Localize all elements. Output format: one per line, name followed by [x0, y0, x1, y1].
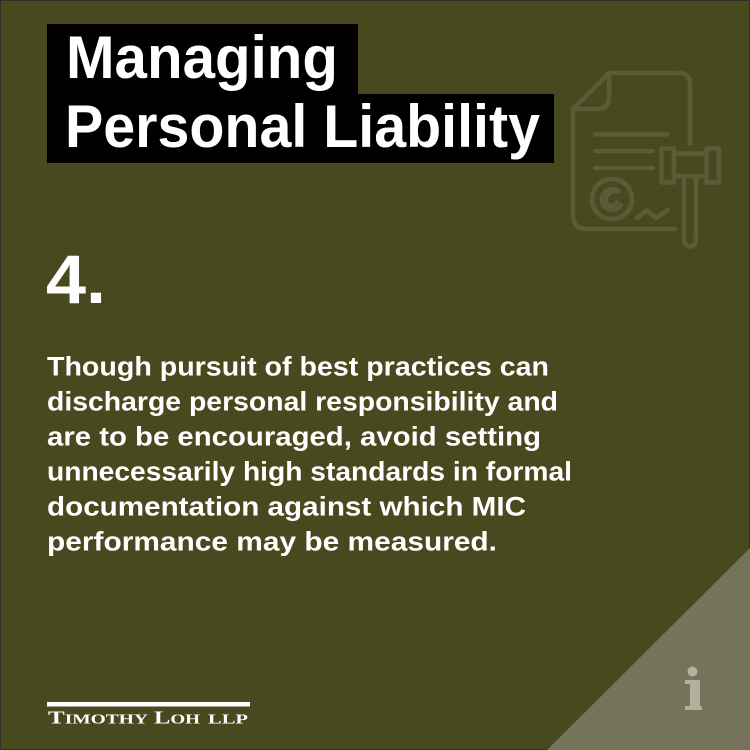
title box line 1 — [47, 24, 358, 94]
item number: 4. — [46, 241, 106, 318]
body text — [47, 352, 572, 556]
icon: legal document with gavel — [573, 73, 719, 246]
logo: Timothy Loh LLP: LLP — [208, 712, 249, 728]
body text: performance may be measured. — [47, 526, 497, 556]
body text: Though pursuit of best practices can — [47, 352, 549, 382]
icon: info letter i — [685, 666, 702, 710]
body text: are to be encouraged, avoid setting — [47, 422, 541, 452]
body text: unnecessarily high standards in formal — [47, 456, 572, 486]
title line 2: Personal Liability — [65, 93, 541, 160]
title box line 2 — [47, 94, 554, 163]
body text: discharge personal responsibility and — [47, 386, 558, 416]
logo: Timothy Loh LLP: L OH — [154, 708, 200, 728]
logo: Timothy Loh LLP — [47, 702, 250, 728]
body text: documentation against which MIC — [47, 492, 526, 522]
logo: Timothy Loh LLP: T IMOTHY — [48, 708, 148, 728]
panel: corner triangle — [547, 548, 750, 750]
title line 1: Managing — [66, 24, 338, 91]
title — [47, 24, 554, 163]
